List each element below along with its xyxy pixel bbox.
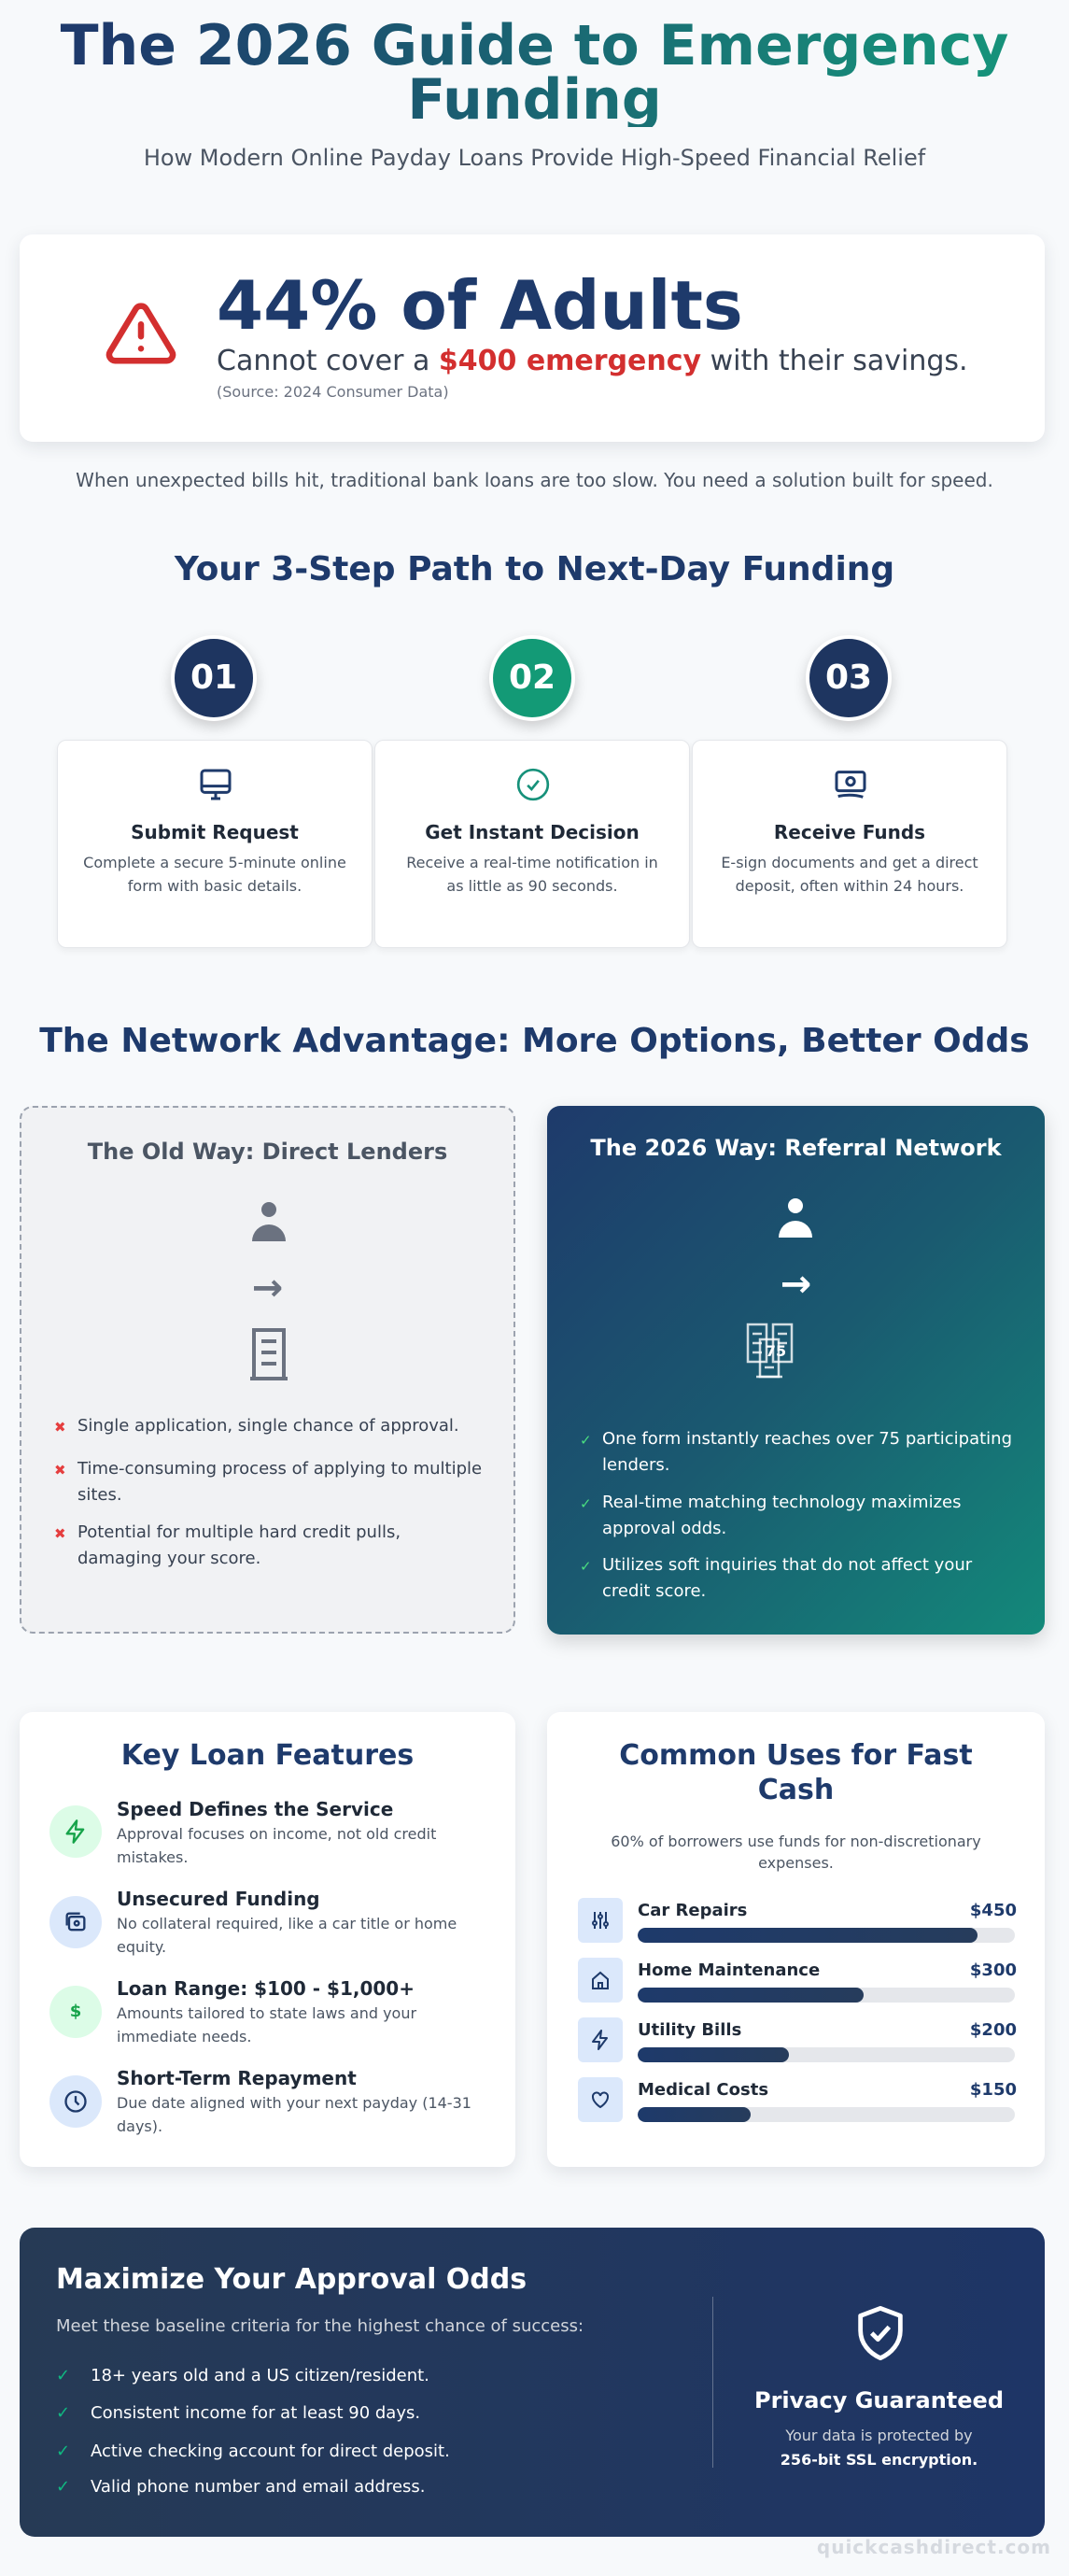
feature: speed: Speed Defines the Service	[117, 1798, 393, 1820]
banner subtitle: Meet these baseline criteria for the highest chance of success:	[56, 2316, 584, 2336]
icon: check circle	[517, 768, 549, 801]
feature: loan range	[49, 1977, 416, 2045]
footer: website: quickcashdirect.com	[817, 2536, 1051, 2558]
con bullets: ✖	[54, 1419, 66, 1436]
step text: Complete a secure 5-minute online form with basic details.	[83, 854, 346, 895]
con bullets: ✖	[54, 1525, 66, 1542]
feature: repayment: Short-Term Repayment	[117, 2067, 357, 2089]
heading: network advantage: The Network Advantage: More Options, Better Odds	[39, 1022, 1030, 1060]
icon: dollar: $	[70, 2002, 81, 2021]
feature: repayment	[49, 2067, 471, 2135]
row: utility bills: Utility Bills	[638, 2020, 741, 2040]
feature: loan range: Amounts tailored to state laws and your immediate needs.	[117, 2004, 416, 2045]
icon: lightning	[49, 1805, 102, 1858]
icon: dollar	[49, 1986, 102, 2038]
subtitle: 60% of borrowers use funds for non-discretionary expenses.	[611, 1833, 981, 1872]
feature: unsecured	[49, 1888, 457, 1956]
step text: E-sign documents and get a direct deposit, often within 24 hours.	[721, 854, 978, 895]
panel title: The Old Way: Direct Lenders	[88, 1139, 447, 1165]
pro bullets: One form instantly reaches over 75 participating lenders.	[602, 1429, 1012, 1475]
icon: multiple lenders: 75	[766, 1342, 786, 1360]
step circle 1	[171, 635, 257, 721]
row: car repairs	[578, 1898, 1017, 1943]
heading: 3-step path: Your 3-Step Path to Next-Day Funding	[175, 550, 894, 588]
step title: Receive Funds	[774, 821, 925, 843]
stat description: Cannot cover a $400 emergency with their savings.	[217, 345, 968, 377]
panel: 2026 way	[547, 1106, 1045, 1635]
intro text: When unexpected bills hit, traditional bank loans are too slow. You need a solution built for speed.	[76, 469, 993, 491]
criteria list: Active checking account for direct deposit.	[91, 2442, 450, 2461]
icon: person	[252, 1202, 286, 1241]
row: medical costs: Medical Costs	[638, 2080, 768, 2100]
source: (Source: 2024 Consumer Data)	[217, 383, 449, 401]
arrow: →	[781, 1263, 811, 1306]
step text: Receive a real-time notification in as little as 90 seconds.	[406, 854, 658, 895]
privacy block: Privacy Guaranteed	[754, 2387, 1004, 2413]
icon: money	[49, 1896, 102, 1948]
criteria list: ✓	[56, 2477, 70, 2497]
panel: common uses	[547, 1712, 1045, 2167]
icon: lender cabinet	[250, 1328, 288, 1380]
title	[0, 19, 1069, 127]
bar chart	[578, 1898, 1017, 2122]
step circle 2	[489, 635, 575, 721]
icon: shield	[858, 2305, 903, 2361]
row: medical costs	[578, 2077, 1017, 2122]
step circle 3	[806, 635, 892, 721]
icon: clock	[49, 2075, 102, 2128]
criteria list: ✓	[56, 2442, 70, 2461]
criteria list: 18+ years old and a US citizen/resident.	[91, 2366, 429, 2385]
con bullets: Potential for multiple hard credit pulls, damaging your score.	[77, 1522, 401, 1568]
panel: approval odds banner	[20, 2228, 1045, 2537]
feature: speed	[49, 1798, 436, 1866]
step card 2	[374, 740, 690, 948]
pro bullets: Utilizes soft inquiries that do not affect your credit score.	[602, 1555, 972, 1601]
step title: Submit Request	[131, 821, 299, 843]
row: home maintenance: $300	[970, 1960, 1017, 1980]
privacy block: Your data is protected by	[785, 2427, 973, 2444]
panel title: Key Loan Features	[121, 1739, 414, 1772]
panel: stat card	[20, 234, 1045, 442]
feature: unsecured: Unsecured Funding	[117, 1888, 320, 1910]
con bullets: Time-consuming process of applying to multiple sites.	[77, 1459, 482, 1505]
criteria list: ✓	[56, 2366, 70, 2385]
step card 3	[692, 740, 1007, 948]
stat headline: 44% of Adults	[217, 266, 743, 345]
panel title: The 2026 Way: Referral Network	[590, 1135, 1002, 1161]
criteria list: ✓	[56, 2403, 70, 2423]
row: home maintenance: Home Maintenance	[638, 1960, 820, 1980]
con bullets: Single application, single chance of approval.	[77, 1416, 459, 1436]
pro bullets: ✓	[580, 1432, 592, 1449]
icon: cash	[835, 771, 866, 799]
panel: key loan features	[20, 1712, 515, 2167]
banner title: Maximize Your Approval Odds	[56, 2263, 527, 2296]
pro bullets: Real-time matching technology maximizes approval odds.	[602, 1493, 962, 1538]
privacy block	[754, 2305, 1004, 2469]
icon: warning triangle	[106, 303, 176, 364]
criteria list: Valid phone number and email address.	[91, 2477, 426, 2497]
privacy block: 256-bit SSL encryption.	[781, 2451, 978, 2469]
row: car repairs: Car Repairs	[638, 1901, 747, 1920]
feature: repayment: Due date aligned with your next payday (14-31 days).	[117, 2094, 471, 2135]
feature: speed: Approval focuses on income, not old credit mistakes.	[117, 1825, 436, 1866]
subtitle: How Modern Online Payday Loans Provide High-Speed Financial Relief	[144, 145, 925, 171]
row: home maintenance	[578, 1958, 1017, 2003]
panel: old way	[20, 1106, 515, 1634]
row: utility bills	[578, 2017, 1017, 2062]
con bullets	[54, 1416, 482, 1568]
con bullets: ✖	[54, 1462, 66, 1479]
pro bullets: ✓	[580, 1495, 592, 1512]
step circle 1: 01	[190, 658, 237, 697]
arrow: →	[252, 1267, 283, 1309]
icon: monitor	[200, 770, 232, 800]
criteria list	[56, 2366, 450, 2497]
icon: multiple lenders	[747, 1323, 794, 1379]
criteria list: Consistent income for at least 90 days.	[91, 2403, 420, 2423]
pro bullets: ✓	[580, 1558, 592, 1575]
step title: Get Instant Decision	[425, 821, 640, 843]
panel title: Common Uses for Fast Cash	[619, 1739, 973, 1806]
title: Funding	[407, 67, 662, 133]
icon: person	[779, 1198, 812, 1238]
step card 1	[57, 740, 373, 948]
row: utility bills: $200	[970, 2020, 1017, 2040]
step circle 3: 03	[825, 658, 872, 697]
step circle 2: 02	[509, 658, 556, 697]
feature: unsecured: No collateral required, like a car title or home equity.	[117, 1915, 457, 1956]
row: medical costs: $150	[970, 2080, 1017, 2100]
feature: loan range: Loan Range: $100 - $1,000+	[117, 1977, 415, 2000]
row: car repairs: $450	[970, 1901, 1017, 1920]
title: The 2026 Guide to Emergency	[61, 13, 1008, 78]
pro bullets	[580, 1429, 1012, 1601]
